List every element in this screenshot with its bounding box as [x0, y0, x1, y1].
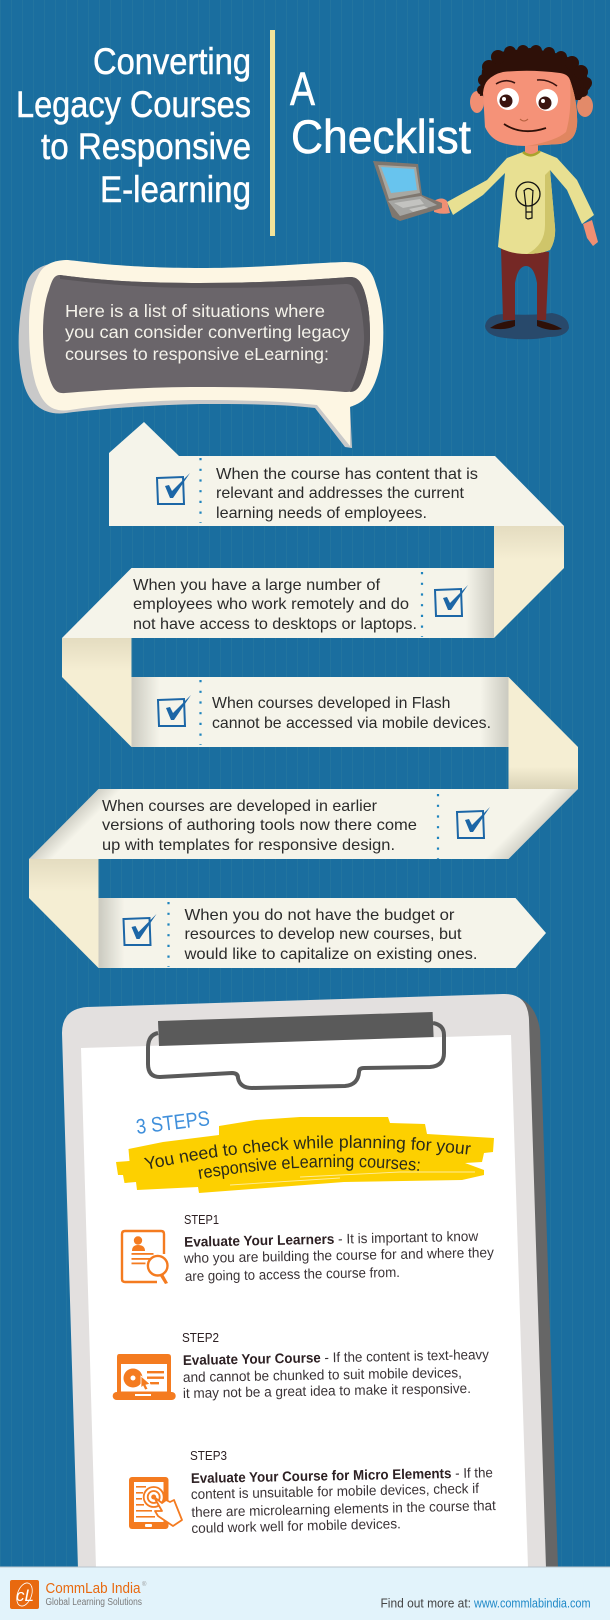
bubble text: Here is a list of situations where: [65, 301, 325, 321]
item text: When the course has content that is: [216, 466, 478, 483]
heading: 3 steps: 3 STEPS: [135, 1107, 211, 1139]
ribbon item 3: [132, 677, 508, 747]
step text: are going to access the course from.: [185, 1264, 400, 1284]
subheading: responsive eLearning courses:: [198, 1154, 420, 1179]
step text: [183, 1346, 489, 1401]
title: course conversion: E-learning: [100, 169, 251, 210]
registered mark: ®: [142, 1581, 147, 1588]
board shadow: [503, 994, 558, 1568]
title: course conversion: to Responsive: [41, 126, 251, 167]
step text: content is unsuitable for mobile devices, check if: [191, 1480, 479, 1502]
bubble shadow: [19, 262, 352, 448]
logo mark: [10, 1580, 39, 1609]
bubble text: courses to responsive eLearning:: [65, 344, 329, 364]
step text: Evaluate Your Learners - It is important to know: [184, 1228, 479, 1250]
board: [62, 994, 546, 1568]
ribbon item 2: [62, 568, 494, 638]
ribbon item 4: [29, 789, 578, 859]
icon: check box: [158, 695, 191, 726]
dotted line: [199, 680, 202, 745]
item text: When courses developed in Flash: [212, 695, 450, 712]
icon: check box: [435, 585, 468, 616]
step text: and cannot be chunked to suit mobile devices,: [183, 1364, 462, 1385]
item text: When you have a large number of: [133, 577, 381, 594]
step text: [183, 1228, 494, 1284]
clip outline: [148, 1023, 444, 1088]
item text: When courses are developed in earlier: [102, 798, 378, 815]
title: a checklist: A: [290, 62, 316, 115]
title: course conversion: Converting: [93, 41, 251, 82]
step text: who you are building the course for and where they: [183, 1244, 494, 1266]
icon: laptop with course: [113, 1354, 176, 1400]
step label: STEP1: [184, 1212, 219, 1227]
icon: check box: [457, 807, 490, 838]
step text: it may not be a great idea to make it responsive.: [183, 1380, 471, 1401]
icon: check box: [124, 914, 156, 945]
icon: check box: [157, 473, 190, 504]
hair: [477, 45, 592, 100]
dotted line: [421, 572, 423, 637]
icon: tablet touch: [129, 1477, 182, 1529]
clipboard: [62, 994, 558, 1566]
dotted line: [199, 458, 202, 523]
ribbon item 5: [98, 898, 546, 968]
bubble text: [65, 301, 350, 364]
dotted line: [167, 902, 170, 967]
bubble text: you can consider converting legacy: [65, 322, 350, 342]
website call to action: Find out more at:: [380, 1596, 471, 1610]
folds of ribbon: [29, 526, 578, 968]
step 2: [113, 1330, 489, 1401]
step text: Evaluate Your Course - If the content is text-heavy: [183, 1346, 489, 1368]
highlight brush: [116, 1117, 494, 1193]
title: course conversion: [16, 41, 251, 210]
step label: STEP2: [182, 1330, 219, 1345]
item text: [133, 577, 417, 633]
step text: [191, 1464, 496, 1536]
item text: [216, 466, 478, 522]
step label: STEP3: [190, 1448, 227, 1463]
item text: [212, 695, 491, 732]
website call to action: [380, 1596, 590, 1610]
item text: versions of authoring tools now there come: [102, 817, 417, 834]
footer: [0, 1566, 610, 1620]
dotted line: [437, 794, 439, 859]
item text: When you do not have the budget or: [184, 907, 455, 924]
item text: up with templates for responsive design.: [102, 837, 395, 854]
step 1: [122, 1212, 494, 1284]
bubble body: [29, 260, 383, 446]
bubble panel: [43, 275, 370, 393]
item text: would like to capitalize on existing ones.: [183, 946, 478, 963]
tagline: Global Learning Solutions: [46, 1597, 142, 1608]
step text: could work well for mobile devices.: [191, 1515, 401, 1536]
subheading: You need to check while planning for your: [144, 1135, 471, 1169]
clip bar: [158, 1012, 434, 1046]
icon: learner profile: [122, 1231, 168, 1284]
item text: relevant and addresses the current: [216, 485, 465, 502]
item text: cannot be accessed via mobile devices.: [212, 715, 491, 732]
item text: [102, 798, 417, 854]
speech bubble: [19, 260, 383, 448]
step text: Evaluate Your Course for Micro Elements - If the: [191, 1464, 493, 1486]
item text: not have access to desktops or laptops.: [133, 616, 417, 633]
item text: employees who work remotely and do: [133, 596, 409, 613]
character: boy holding laptop: [373, 45, 598, 339]
title divider: [270, 30, 275, 236]
step text: there are microlearning elements in the course that: [191, 1497, 496, 1520]
brand name: CommLab India: [46, 1580, 141, 1597]
item text: [183, 907, 478, 963]
website call to action: www.commlabindia.com: [473, 1596, 590, 1610]
title: a checklist: Checklist: [291, 110, 471, 163]
paper: [81, 1035, 528, 1568]
logo mark: cL: [16, 1586, 34, 1605]
item text: learning needs of employees.: [216, 505, 427, 522]
title: a checklist: [290, 62, 471, 163]
ribbon item 1: [109, 422, 564, 526]
item text: resources to develop new courses, but: [184, 926, 462, 943]
step 3: [129, 1448, 496, 1536]
title: course conversion: Legacy Courses: [16, 84, 251, 125]
